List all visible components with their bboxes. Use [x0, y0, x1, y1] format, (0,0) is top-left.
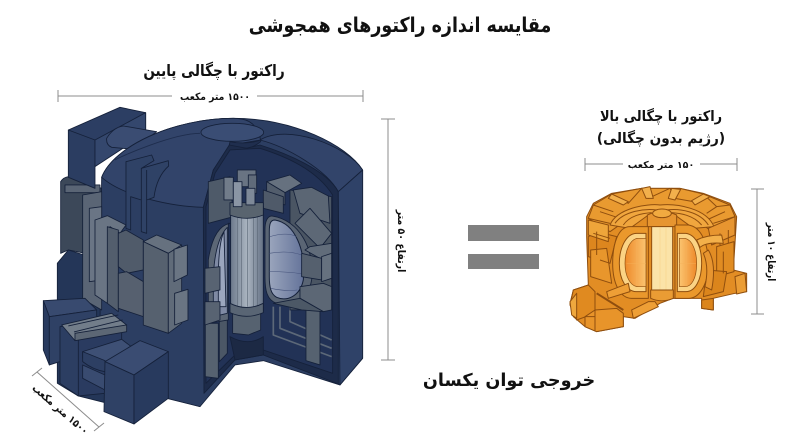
front box [104, 341, 168, 424]
inner dome ring [610, 205, 714, 228]
front vertical ports [126, 155, 169, 233]
dome right part [260, 134, 363, 192]
dimension: height low density: ارتفاع ۵۰ متر [395, 209, 406, 272]
outer segmented ring [570, 188, 747, 332]
central post [647, 209, 677, 301]
side port frame [83, 192, 102, 310]
central solenoid [230, 182, 263, 335]
right D coil [675, 225, 708, 298]
heading: high density reactor: راکتور با چگالی بالا [600, 107, 722, 125]
dimension: height low density [381, 119, 406, 360]
title: مقایسه اندازه راکتورهای همجوشی [249, 14, 551, 37]
dimension: diagonal depth: ۱۵۰۰ متر مکعب [29, 383, 90, 437]
side blocks right [708, 217, 735, 245]
main magnet blocks [95, 216, 188, 333]
lower left modules [570, 285, 623, 332]
left D coil [208, 223, 230, 323]
dimension: top width low density [58, 90, 363, 103]
dimension: top width high density [585, 158, 737, 171]
outer wall cut edge [338, 170, 363, 385]
cooling block [60, 313, 140, 396]
right D coil [265, 216, 312, 304]
heading: high density reactor [597, 107, 725, 147]
lower left box [43, 298, 97, 365]
dimension: top width low density: ۱۵۰۰ متر مکعب [180, 92, 250, 103]
heading: high density reactor: (رژیم بدون چگالی) [597, 130, 725, 147]
support pipes [273, 307, 332, 357]
lower navy mass [57, 250, 200, 410]
cylinder body [100, 118, 363, 407]
illustration: high density reactor (orange) [570, 187, 747, 332]
equals sign [468, 225, 539, 269]
back box [68, 107, 157, 188]
caption: same power output: خروجی توان یکسان [423, 371, 595, 391]
dome hatch [201, 123, 264, 141]
lower pipes [607, 283, 658, 318]
illustration: low density reactor (navy) [43, 107, 363, 424]
left D coil [613, 227, 648, 298]
dimension: diagonal depth [29, 368, 104, 437]
dimension: height high density [751, 189, 777, 314]
side blocks left [588, 232, 617, 263]
right port [735, 273, 747, 294]
upper coils/back blocks [267, 175, 302, 193]
background gray mass [290, 190, 332, 310]
back side column [61, 177, 102, 257]
heading: low density reactor: راکتور با چگالی پایین [143, 61, 285, 80]
dome left part [102, 118, 261, 207]
right side blocks [295, 208, 332, 248]
dimension: top width high density: ۱۵۰ متر مکعب [628, 160, 694, 171]
top ring [588, 188, 735, 232]
cutaway interior [203, 145, 338, 393]
feed pipe right [697, 235, 723, 247]
dimension: height high density: ارتفاع ۱۰ متر [765, 222, 777, 281]
